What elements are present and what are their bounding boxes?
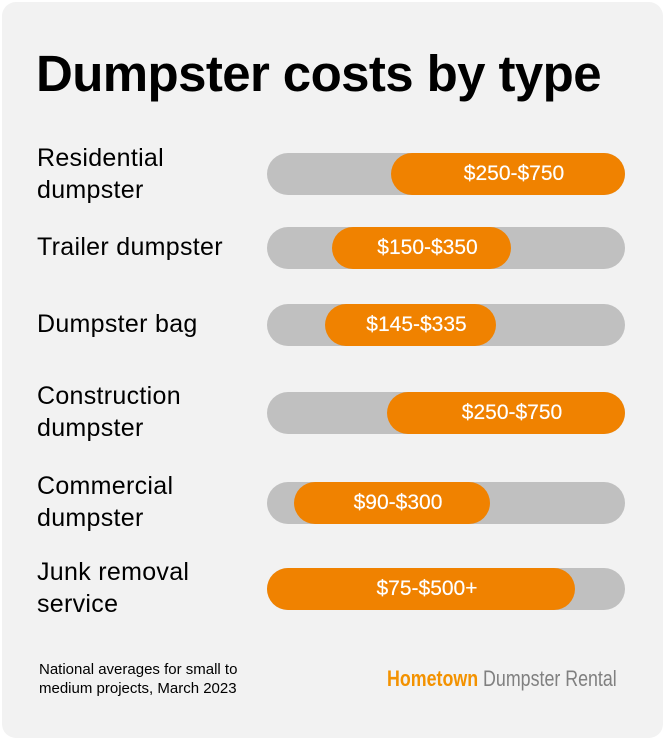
row label: commercial: Commercial bbox=[37, 472, 173, 500]
row label: junk removal bbox=[37, 558, 189, 618]
row label: junk removal: service bbox=[37, 590, 118, 618]
row label: residential: dumpster bbox=[37, 176, 144, 204]
bar: residential bbox=[267, 153, 625, 195]
row label: residential bbox=[37, 144, 164, 204]
row label: commercial: dumpster bbox=[37, 504, 144, 532]
bar: commercial: $90-$300 bbox=[354, 491, 442, 514]
footnote: National averages for small to bbox=[39, 661, 237, 678]
bar: construction: $250-$750 bbox=[462, 401, 562, 424]
row label: construction bbox=[37, 382, 181, 442]
footnote bbox=[39, 661, 237, 697]
bar: trailer: $150-$350 bbox=[377, 236, 478, 259]
bar: residential: $250-$750 bbox=[464, 162, 564, 185]
row label: commercial bbox=[37, 472, 173, 532]
row label: bag: Dumpster bag bbox=[37, 310, 198, 338]
logo: Hometown Dumpster Rental bbox=[387, 666, 617, 691]
bar: junk removal: $75-$500+ bbox=[376, 577, 478, 600]
bar: junk removal bbox=[267, 568, 625, 610]
bar: commercial bbox=[267, 482, 625, 524]
bar: construction bbox=[267, 392, 625, 434]
bar: trailer bbox=[267, 227, 625, 269]
row label: construction: dumpster bbox=[37, 414, 144, 442]
footnote: medium projects, March 2023 bbox=[39, 680, 237, 697]
row label: junk removal: Junk removal bbox=[37, 558, 189, 586]
title: Dumpster costs by type bbox=[36, 45, 601, 102]
row label: construction: Construction bbox=[37, 382, 181, 410]
bar: bag bbox=[267, 304, 625, 346]
row label: residential: Residential bbox=[37, 144, 164, 172]
bar: bag: $145-$335 bbox=[366, 313, 467, 336]
row label: trailer: Trailer dumpster bbox=[37, 233, 223, 261]
